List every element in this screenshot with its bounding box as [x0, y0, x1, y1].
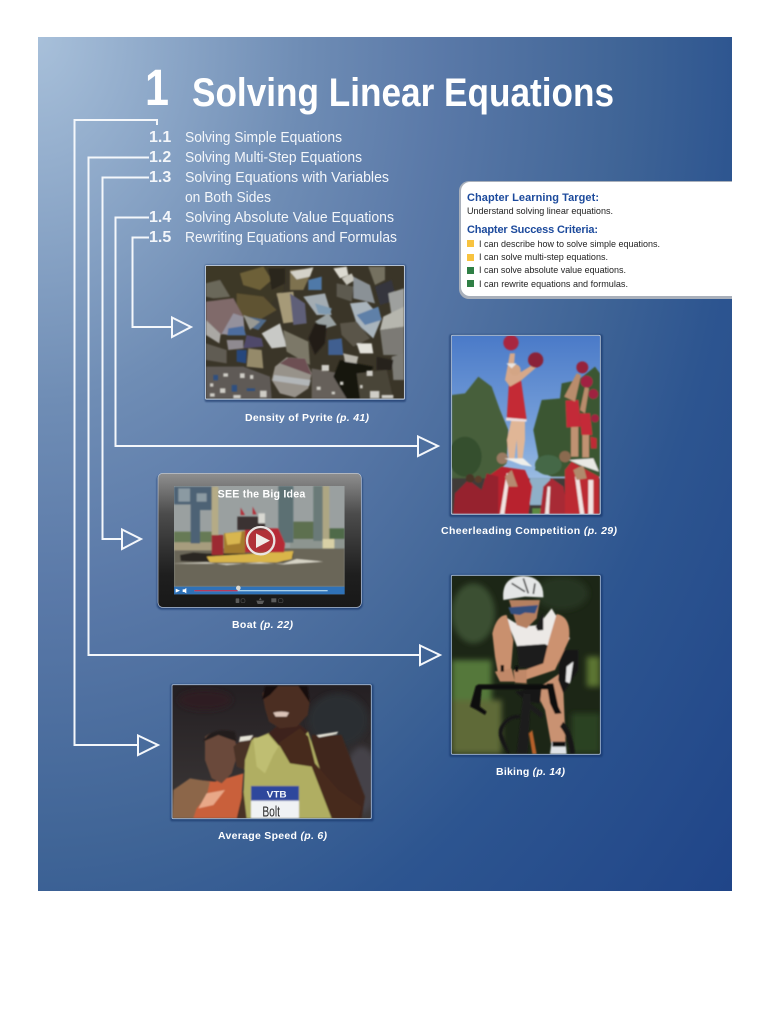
- criterion 4: I can rewrite equations and formulas.: [479, 279, 628, 290]
- title: 1: [145, 59, 169, 116]
- photo: pyrite crystals: [205, 265, 406, 402]
- bike: [499, 715, 575, 754]
- caption: average speed: Average Speed (p. 6): [218, 830, 328, 842]
- head: [262, 686, 310, 728]
- caption: boat: Boat (p. 22): [232, 619, 294, 631]
- arrow: section 1.4 to cheerleading: [116, 218, 438, 456]
- arrow: section 1.5 to pyrite: [132, 238, 191, 337]
- arrow: section 1.3 to boat: [102, 178, 149, 549]
- section 1.5: Rewriting Equations and Formulas: [185, 229, 397, 246]
- title: [145, 59, 614, 116]
- criterion 3: I can solve absolute value equations.: [479, 265, 626, 276]
- section 1.3: [149, 169, 389, 206]
- section 1.3: 1.3: [149, 169, 171, 186]
- main flyer: [507, 418, 525, 461]
- trees: [452, 377, 508, 480]
- right flyers: [571, 427, 589, 457]
- section 1.2: 1.2: [149, 149, 171, 166]
- section 1.1: 1.1: [149, 129, 171, 146]
- photo: sprinter: Bolt: [262, 805, 280, 821]
- background panel: [38, 37, 732, 891]
- caption: cheerleading competition: Cheerleading Competition (p. 29): [441, 525, 618, 537]
- criterion 1: I can describe how to solve simple equations.: [479, 239, 660, 250]
- caption: density of pyrite: Density of Pyrite (p. 41): [245, 412, 370, 424]
- heading: chapter success criteria: Chapter Success Criteria:: [467, 224, 598, 236]
- section 1.3: Solving Equations with Variables: [185, 169, 389, 186]
- connector lines and arrows: [74, 120, 440, 755]
- photo: sprinter: [170, 684, 378, 821]
- tablet: boat video: [157, 473, 363, 610]
- section 1.3: on Both Sides: [185, 189, 271, 206]
- section 1.1: Solving Simple Equations: [185, 129, 342, 146]
- photo: sprinter: VTB: [267, 790, 287, 800]
- tablet buttons: [236, 597, 283, 604]
- icon: play button: [247, 527, 274, 554]
- arrow: section 1.2 to biking: [88, 158, 440, 665]
- bases: [487, 467, 532, 514]
- video frame: [174, 486, 345, 594]
- title: Solving Linear Equations: [192, 71, 614, 115]
- photo: cyclist: [449, 574, 603, 757]
- section 1.4: 1.4: [149, 209, 171, 226]
- torso: [506, 608, 571, 648]
- arms: [492, 615, 513, 675]
- video control bar: [174, 586, 345, 594]
- legs: [535, 673, 566, 743]
- main runner body: [312, 735, 365, 818]
- second runner: [193, 773, 243, 818]
- section list: [149, 129, 397, 246]
- big idea label: SEE the Big Idea: [218, 489, 305, 501]
- section 1.4: Solving Absolute Value Equations: [185, 209, 394, 226]
- caption: biking: Biking (p. 14): [496, 766, 566, 778]
- learning target text: Understand solving linear equations.: [467, 206, 613, 217]
- section 1.2: Solving Multi-Step Equations: [185, 149, 362, 166]
- bib: [250, 800, 300, 818]
- tugboat: [180, 552, 293, 562]
- scattered crystal flecks: [210, 365, 393, 398]
- criterion 2: I can solve multi-step equations.: [479, 252, 608, 263]
- head: [509, 600, 540, 628]
- photo: cheerleaders: [448, 334, 603, 517]
- panel: chapter opener page: [38, 37, 732, 891]
- callout: learning target and success criteria: [459, 181, 732, 299]
- arrow: section 1.1 to average speed: [74, 120, 158, 755]
- heading: chapter learning target: Chapter Learning Target:: [467, 192, 599, 204]
- section 1.5: 1.5: [149, 229, 171, 246]
